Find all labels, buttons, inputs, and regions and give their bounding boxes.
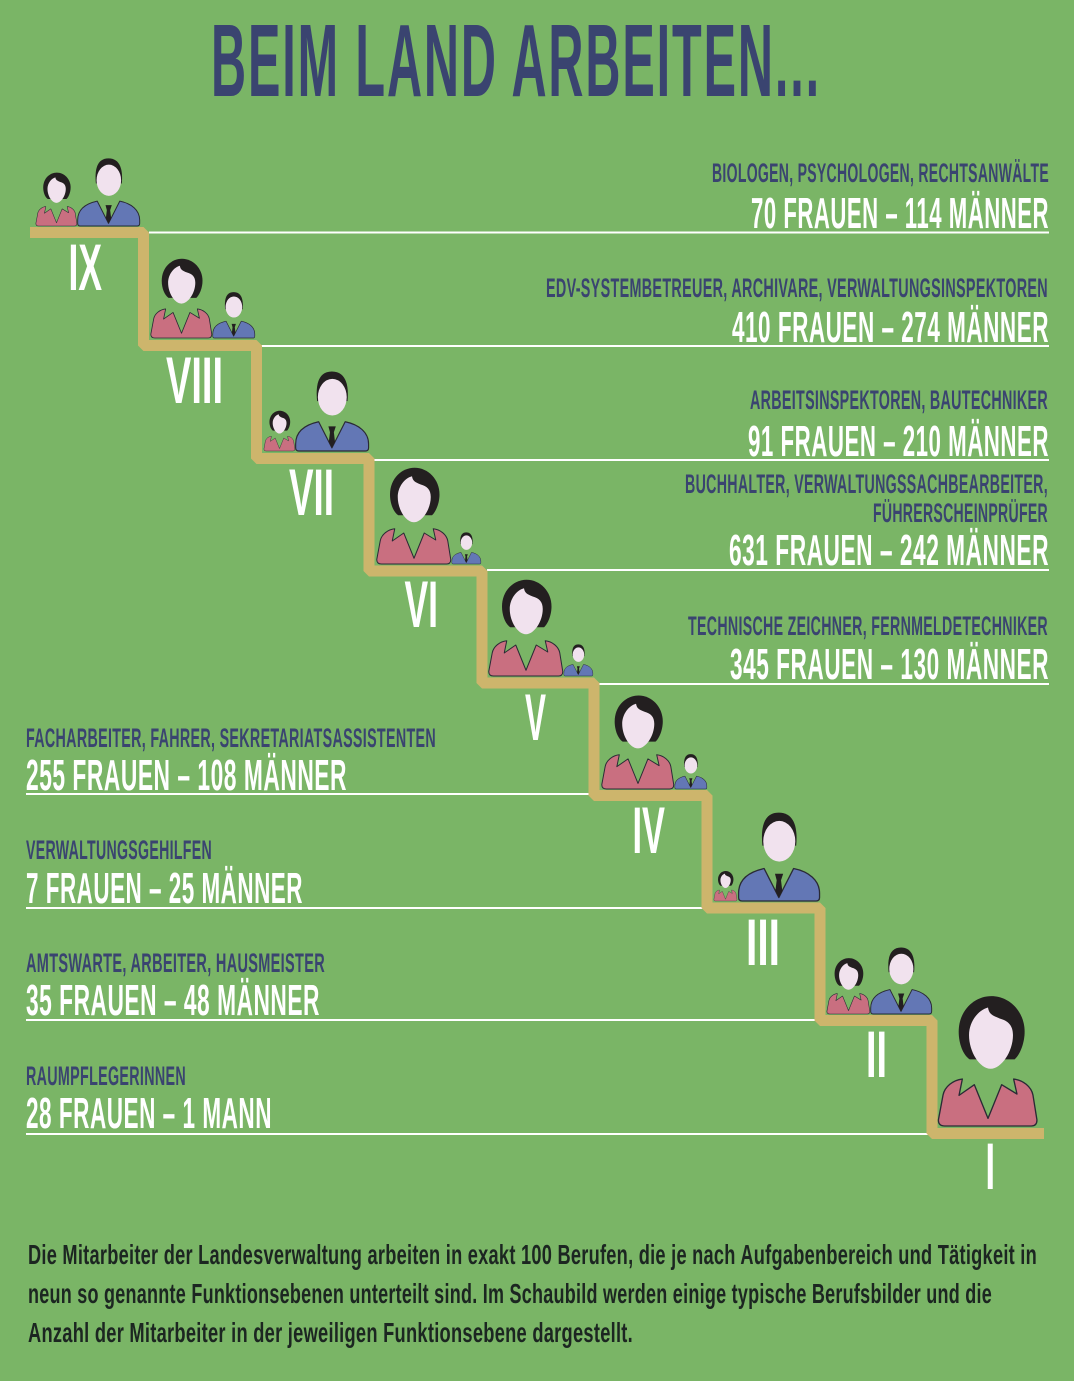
level V [489,580,1049,754]
level III [26,813,820,979]
icon: man IV [675,754,707,789]
icon: man VII [296,371,369,451]
icon: man III [739,813,820,901]
icon: woman VII [264,411,295,451]
icon: woman VI [377,468,451,564]
numeral VI: VI [404,567,438,641]
counts II: 35 FRAUEN – 48 MÄNNER [26,976,320,1025]
counts IV: 255 FRAUEN – 108 MÄNNER [26,751,347,800]
level II [26,947,932,1091]
numeral VIII: VIII [166,343,223,417]
icon: man V [564,644,593,676]
icon: woman II [827,958,870,1014]
icon: woman III [714,871,737,901]
icon: man VI [452,532,481,564]
icon: woman IV [602,695,674,789]
icon: woman IX [36,173,77,226]
level I [26,996,1037,1203]
numeral III: III [746,905,780,979]
numeral II: II [866,1017,887,1091]
numeral I: I [986,1129,995,1203]
counts III: 7 FRAUEN – 25 MÄNNER [26,864,303,913]
counts I: 28 FRAUEN – 1 MANN [26,1089,272,1138]
icon: man IX [78,158,140,226]
explanatory paragraph [28,1239,1037,1348]
level VI [377,468,1049,641]
icon: woman VIII [151,259,212,338]
occupations II: AMTSWARTE, ARBEITER, HAUSMEISTER [26,948,325,978]
occupations IV: FACHARBEITER, FAHRER, SEKRETARIATSASSISTENTEN [26,723,436,753]
level VII [264,371,1049,529]
icon: woman V [489,580,563,676]
staircase [30,232,1044,1134]
explanatory paragraph: Anzahl der Mitarbeiter in der jeweiligen Funktionsebene dargestellt. [28,1317,633,1348]
occupations I: RAUMPFLEGERINNEN [26,1061,186,1091]
numeral IX: IX [68,230,102,304]
level IX [36,158,1049,304]
occupations III: VERWALTUNGSGEHILFEN [26,835,212,865]
icon: man II [871,947,932,1014]
level VIII [151,259,1049,417]
numeral IV: IV [632,793,665,867]
level V: V [525,680,546,754]
numeral VII: VII [289,455,334,529]
icon: man VIII [213,292,255,338]
icon: woman I [938,996,1037,1126]
level IV [26,695,707,867]
